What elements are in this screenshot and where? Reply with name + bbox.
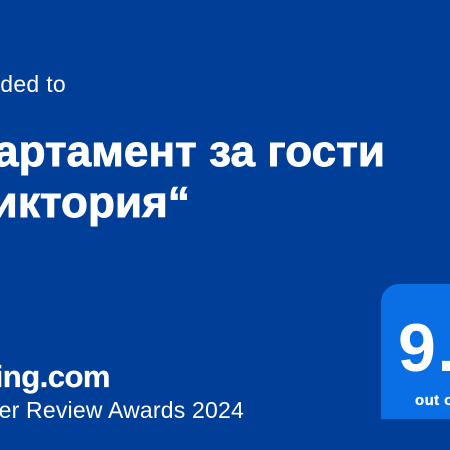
heading: property name [0,127,385,227]
score badge [381,284,450,419]
